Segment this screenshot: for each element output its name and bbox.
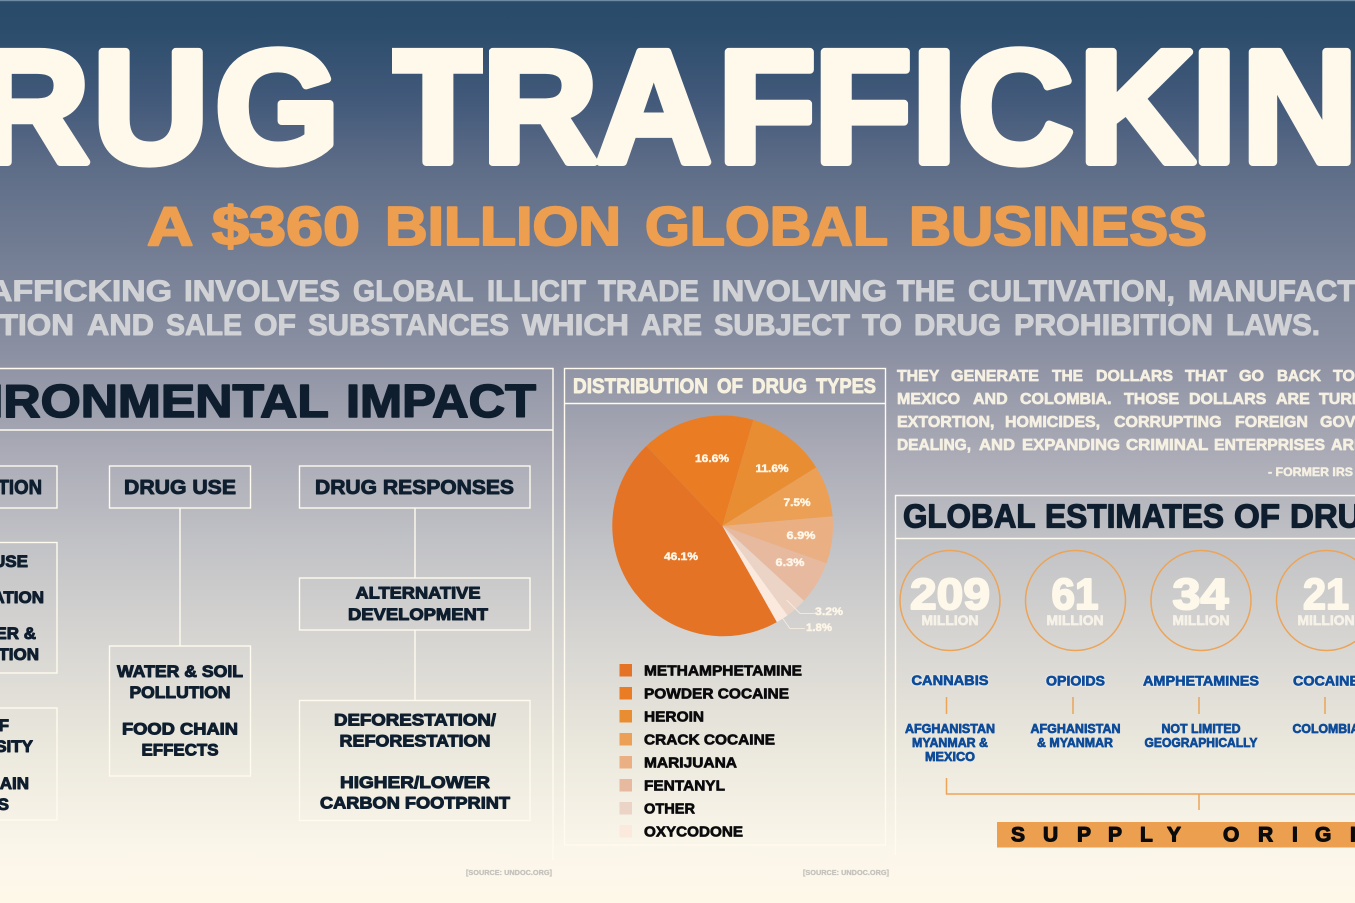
quote: ARE — [1276, 391, 1310, 408]
quote: AND — [979, 437, 1015, 454]
quote: COLOMBIA. — [1020, 391, 1112, 408]
intro paragraph: INVOLVES — [184, 275, 340, 308]
pie chart: 3.2% — [815, 606, 843, 618]
subtitle: GLOBAL — [645, 195, 887, 257]
quote: AND — [973, 391, 1008, 408]
column: drug responses: ALTERNATIVE — [356, 584, 480, 602]
subtitle: $360 — [212, 195, 360, 257]
pie chart — [612, 416, 843, 636]
stat: opioids: MILLION — [1046, 612, 1104, 628]
quote: FOREIGN — [1235, 414, 1308, 431]
pie chart: 6.9% — [786, 530, 816, 542]
quote: THOSE — [1124, 391, 1179, 408]
intro paragraph: WHICH — [522, 309, 629, 342]
stat: amphetamines: AMPHETAMINES — [1143, 672, 1259, 688]
pie chart: 46.1% — [664, 551, 698, 563]
source note: distribution: [SOURCE: UNDOC.ORG] — [803, 868, 889, 877]
quote: - FORMER IRS — [1268, 467, 1353, 479]
quote: THE — [1052, 368, 1083, 385]
intro paragraph: TO — [862, 309, 902, 342]
subtitle: A — [147, 195, 193, 257]
legend: OXYCODONE — [644, 824, 743, 840]
legend — [620, 662, 802, 840]
quote: DEALING, — [897, 437, 971, 454]
quote: GO — [1239, 368, 1264, 385]
intro paragraph: SUBJECT — [714, 309, 850, 342]
pie chart: 7.5% — [784, 497, 811, 509]
heading: distribution: TYPES — [816, 375, 876, 398]
intro paragraph: ARE — [641, 309, 702, 342]
intro paragraph: THE — [897, 275, 955, 308]
heading: global estimates: OF — [1234, 498, 1280, 534]
column: drug use: DRUG USE — [124, 477, 236, 499]
stat: amphetamines: GEOGRAPHICALLY — [1144, 736, 1258, 750]
pie chart: 1.8% — [806, 622, 832, 634]
stat: cocaine: MILLION — [1298, 612, 1354, 628]
column: drug responses: DEFORESTATION/ — [334, 710, 496, 730]
stat: amphetamines — [1143, 550, 1259, 750]
intro paragraph: PROHIBITION — [1014, 309, 1213, 342]
intro paragraph: DRUG — [914, 309, 1001, 342]
quote — [897, 368, 1355, 479]
intro paragraph: AND — [87, 309, 154, 342]
pie chart: 11.6% — [756, 463, 789, 475]
heading: environmental impact: IMPACT — [346, 375, 536, 427]
intro paragraph — [0, 275, 1355, 342]
stat: cannabis: MEXICO — [925, 750, 975, 764]
quote: DOLLARS — [1096, 368, 1173, 385]
column: drug use: POLLUTION — [130, 683, 230, 702]
pie chart: 16.6% — [695, 453, 729, 465]
stat: cocaine: 21 — [1303, 570, 1349, 619]
column: drug use: WATER & SOIL — [117, 662, 243, 681]
quote: EXPANDING — [1022, 437, 1120, 454]
intro paragraph: INVOLVING — [712, 275, 887, 308]
column: drug use — [110, 466, 250, 776]
heading: distribution: DRUG — [752, 375, 807, 398]
intro paragraph: ILLICIT — [487, 275, 586, 308]
column: drug responses — [300, 466, 530, 820]
intro paragraph: TRADE — [598, 275, 699, 308]
bracket — [946, 778, 1355, 810]
intro paragraph: SALE — [166, 309, 242, 342]
quote: CORRUPTING — [1114, 414, 1222, 431]
column: drug responses: REFORESTATION — [340, 732, 490, 750]
subtitle: BUSINESS — [909, 195, 1207, 257]
stat: opioids: 61 — [1052, 570, 1098, 619]
panel: global estimates of drug users — [896, 496, 1355, 855]
stat: opioids — [1026, 550, 1126, 750]
heading: distribution: DISTRIBUTION — [573, 375, 708, 398]
column: drug use: FOOD CHAIN — [122, 720, 238, 738]
quote: TO — [1333, 368, 1355, 385]
stat: cannabis: MYANMAR & — [912, 736, 988, 750]
intro paragraph: LAWS. — [1226, 309, 1320, 342]
legend: FENTANYL — [644, 778, 725, 794]
quote: BACK — [1277, 368, 1321, 385]
stat: opioids: & MYANMAR — [1037, 736, 1113, 750]
stat: cannabis — [900, 550, 1000, 764]
quote: HOMICIDES, — [1005, 414, 1100, 431]
legend: POWDER COCAINE — [644, 686, 789, 702]
stat: opioids: OPIOIDS — [1046, 672, 1105, 688]
stat: opioids: AFGHANISTAN — [1030, 722, 1120, 736]
legend: OTHER — [644, 800, 695, 818]
legend: CRACK COCAINE — [644, 732, 775, 748]
intro paragraph: OF — [254, 309, 296, 342]
heading: global estimates: GLOBAL — [903, 498, 1035, 534]
legend: MARIJUANA — [644, 754, 737, 772]
panel: environmental impact — [0, 368, 553, 860]
column: drug use: EFFECTS — [142, 740, 218, 760]
stat: amphetamines: NOT LIMITED — [1162, 722, 1240, 736]
intro paragraph: CULTIVATION, — [968, 275, 1175, 308]
stat: cannabis: AFGHANISTAN — [905, 722, 995, 736]
source note: environmental: [SOURCE: UNDOC.ORG] — [466, 868, 552, 877]
legend: METHAMPHETAMINE — [644, 662, 802, 680]
quote: CRIMINAL — [1126, 437, 1209, 454]
intro paragraph: SUBSTANCES — [308, 309, 509, 342]
column: drug responses: HIGHER/LOWER — [340, 773, 490, 792]
stat: cannabis: 209 — [910, 570, 990, 619]
quote: ENTERPRISES — [1214, 437, 1325, 454]
subtitle: BILLION — [385, 195, 621, 257]
column: drug responses: CARBON FOOTPRINT — [320, 794, 511, 812]
quote: THAT — [1185, 368, 1227, 385]
column: drug production — [0, 466, 57, 820]
quote: DOLLARS — [1189, 391, 1267, 408]
quote: THEY — [897, 368, 940, 385]
legend: HEROIN — [644, 708, 704, 726]
stat: cannabis: MILLION — [922, 612, 978, 628]
quote: EXTORTION, — [897, 414, 994, 431]
quote: GENERATE — [951, 368, 1039, 385]
intro paragraph: GLOBAL — [353, 275, 473, 308]
column: drug responses: DEVELOPMENT — [348, 605, 489, 624]
stat: amphetamines: MILLION — [1172, 612, 1230, 628]
heading: distribution: OF — [717, 375, 743, 398]
pie chart: 6.3% — [776, 557, 805, 569]
stat: amphetamines: 34 — [1172, 570, 1229, 619]
stat: cannabis: CANNABIS — [912, 672, 988, 688]
heading: global estimates: ESTIMATES — [1045, 498, 1224, 534]
stat: cocaine — [1276, 550, 1355, 736]
column: drug responses: DRUG RESPONSES — [315, 477, 514, 499]
panel: distribution of drug types — [564, 368, 886, 845]
quote: MEXICO — [897, 391, 960, 408]
